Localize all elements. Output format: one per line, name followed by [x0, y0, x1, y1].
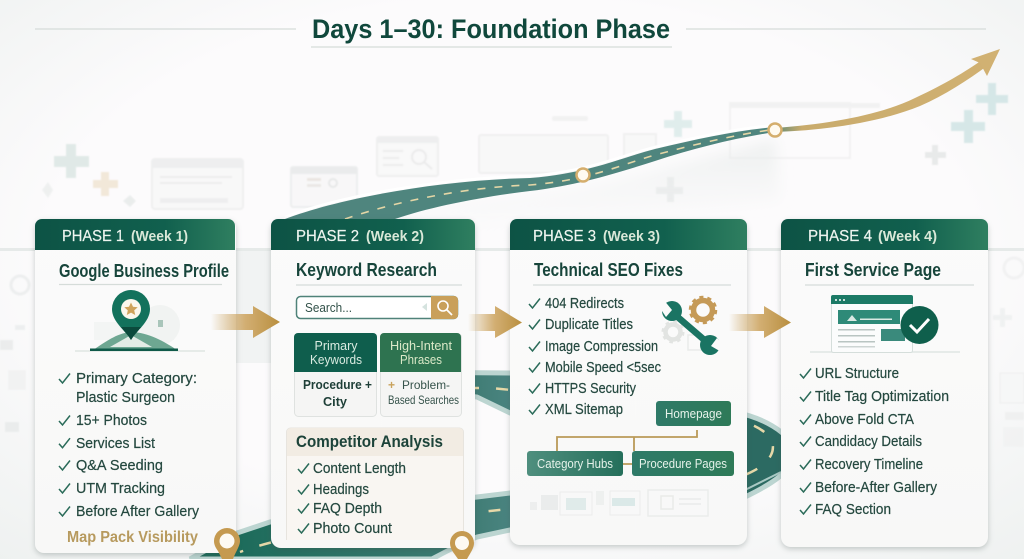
high-intent phrases box: Problem-	[402, 378, 450, 392]
search bar: Search...	[305, 300, 352, 315]
card 3 checklist: HTTPS Security	[545, 381, 637, 397]
primary keywords box	[294, 333, 377, 416]
winding road lower section	[190, 372, 795, 559]
sitemap connectors	[557, 430, 697, 464]
procedure pages node: Procedure Pages	[639, 456, 727, 471]
high-intent phrases box: +	[388, 378, 395, 392]
growth arrow	[775, 49, 1000, 132]
card 2 heading: Keyword Research	[296, 260, 437, 280]
card 2 header: (Week 2)	[366, 229, 424, 245]
card 3 checklist: 404 Redirects	[545, 296, 624, 312]
competitor analysis panel	[286, 428, 464, 540]
card 4 checklist: Candidacy Details	[815, 434, 922, 450]
card 3 header	[510, 219, 747, 250]
card 3 checklist: Mobile Speed <5sec	[545, 360, 661, 376]
card 2 header	[271, 219, 475, 250]
card 4 checklist: Before-After Gallery	[815, 480, 938, 496]
category hubs node: Category Hubs	[537, 456, 613, 471]
card 3 checklist: Image Compression	[545, 339, 658, 355]
primary keywords box: Procedure +	[303, 377, 372, 392]
card 3 checklist: XML Sitemap	[545, 402, 623, 418]
card 4 checklist: Above Fold CTA	[815, 412, 914, 428]
card 4 body	[781, 219, 988, 547]
horizontal band behind cards	[0, 248, 1024, 251]
panel: phase 4	[781, 219, 988, 547]
card 4 header	[781, 219, 988, 250]
category hubs node	[527, 451, 623, 476]
competitor analysis panel: Content Length	[313, 461, 406, 477]
procedure pages node	[632, 451, 734, 476]
card 1 outcome: Map Pack Visibility	[67, 529, 198, 546]
card 2 header: PHASE 2	[296, 228, 359, 245]
card 3 header: PHASE 3	[533, 228, 596, 245]
arrow: phase 2 to 3	[468, 306, 522, 338]
card 4 header: PHASE 4	[808, 228, 872, 245]
card 3 heading: Technical SEO Fixes	[534, 260, 683, 280]
card 1 heading: Google Business Profile	[59, 261, 229, 281]
competitor analysis panel: Photo Count	[313, 521, 392, 537]
competitor analysis panel: FAQ Depth	[313, 501, 382, 517]
card 1 checklist: Before After Gallery	[76, 504, 200, 520]
homepage node	[656, 401, 731, 426]
title: Days 1–30: Foundation Phase	[312, 14, 670, 44]
card 1 checklist: 15+ Photos	[76, 413, 147, 429]
search bar	[296, 296, 458, 319]
card 1 body	[35, 219, 236, 553]
card 4 checklist	[800, 366, 949, 518]
location pin 2	[450, 531, 474, 559]
high-intent phrases box: High-Intent	[390, 339, 453, 353]
competitor analysis panel: Competitor Analysis	[296, 432, 443, 451]
road milestone 2	[768, 124, 782, 136]
card 4 checklist: URL Structure	[815, 366, 899, 382]
icon: map pin	[75, 290, 205, 351]
card 1 checklist: Q&A Seeding	[76, 458, 163, 474]
road upper section	[280, 125, 780, 245]
card 4 checklist: Title Tag Optimization	[815, 389, 949, 405]
card 1 checklist: UTM Tracking	[76, 481, 165, 497]
card 3 body	[510, 219, 747, 545]
arrow: phase 1 to 2	[211, 306, 280, 338]
card 1 header	[35, 219, 235, 250]
homepage node: Homepage	[665, 406, 722, 421]
panel: phase 3	[510, 219, 747, 545]
card 1 header: (Week 1)	[131, 229, 188, 245]
icon: web page with check	[810, 295, 960, 352]
location pin 1	[214, 528, 240, 559]
card 2 body	[271, 219, 475, 548]
arrow: phase 3 to 4	[729, 306, 791, 338]
card 3 header: (Week 3)	[603, 229, 660, 245]
high-intent phrases box: Phrases	[400, 353, 442, 367]
road milestone 1	[576, 168, 590, 182]
icon: wrench and gears	[658, 298, 726, 355]
card 4 header: (Week 4)	[878, 229, 937, 245]
card 4 checklist: FAQ Section	[815, 502, 891, 518]
panel: phase 2	[271, 219, 475, 548]
card 1 checklist: Services List	[76, 436, 155, 452]
primary keywords box: Primary	[314, 339, 358, 353]
card 3 checklist	[529, 296, 661, 418]
primary keywords box: City	[323, 394, 348, 409]
faded background icons	[0, 83, 1024, 447]
card 4 heading: First Service Page	[805, 260, 941, 280]
primary keywords box: Keywords	[310, 353, 362, 367]
competitor analysis panel: Headings	[313, 482, 369, 498]
card 1 checklist	[59, 371, 200, 520]
card 3 checklist: Duplicate Titles	[545, 317, 633, 333]
card 4 checklist: Recovery Timeline	[815, 457, 923, 473]
pale block between cards	[236, 251, 271, 363]
high-intent phrases box: Based Searches	[388, 393, 459, 407]
card 1 checklist: Primary Category:	[76, 371, 197, 387]
panel: phase 1	[35, 219, 236, 553]
high-intent phrases box	[380, 333, 462, 416]
card 1 checklist: Plastic Surgeon	[76, 390, 175, 406]
faded page wireframes	[530, 490, 708, 516]
card 1 header: PHASE 1	[62, 228, 124, 245]
